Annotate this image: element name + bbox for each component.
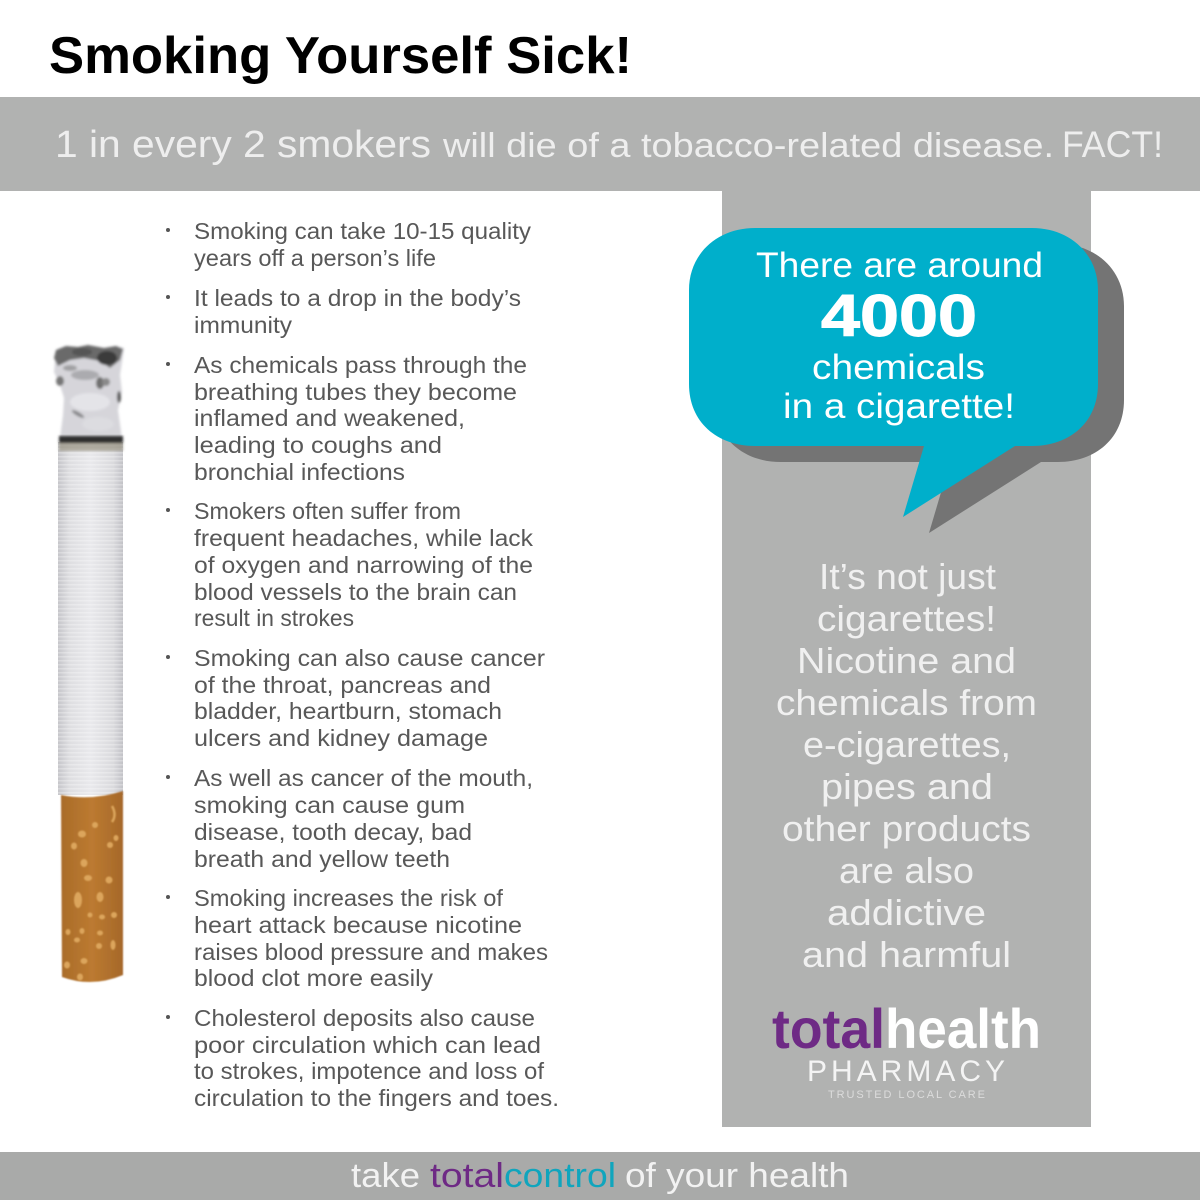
bullet 4: of oxygen and narrowing of the [194,552,533,578]
cigarette filter [61,791,123,982]
panel text: not just cigarettes: pipes and [821,766,993,807]
tagline [351,1157,849,1195]
bullet 3: leading to coughs and [194,432,442,458]
tagline: of your health [625,1157,849,1195]
panel text: not just cigarettes: are also [839,850,974,891]
bullet 4 [166,498,534,631]
logo: totalhealth pharmacy: PHARMACY [807,1055,1005,1088]
top banner [0,97,1200,191]
bubble text: chemicals [812,348,985,387]
bullet 2: It leads to a drop in the body’s [194,285,521,311]
bullet 3: inflamed and weakened, [194,405,465,431]
bullet 3: As chemicals pass through the [194,352,527,378]
bullet 6: breath and yellow teeth [194,846,450,872]
bullet 1: years off a person’s life [194,245,436,271]
bullet 8: poor circulation which can lead [194,1032,541,1058]
banner fact text: FACT! [1062,124,1163,165]
banner fact text: will die of a tobacco-related disease. [442,127,1054,165]
bullet 3 [166,352,527,485]
bubble text: 4000 [821,283,977,349]
bullet 7: Smoking increases the risk of [194,885,504,911]
bullet 6: smoking can cause gum [194,792,465,818]
bubble text [756,246,1043,426]
panel text: not just cigarettes: addictive [827,892,986,933]
bullet 5: Smoking can also cause cancer [194,645,545,671]
bullet 4: frequent headaches, while lack [194,525,534,551]
title: Smoking Yourself Sick! [49,27,632,85]
panel text: not just cigarettes: cigarettes! [817,598,996,639]
cigarette ash [54,345,124,438]
bullet list [166,218,559,1111]
banner fact text [55,124,1163,166]
panel text: not just cigarettes: chemicals from [776,682,1037,723]
speech bubble callout [689,228,1124,533]
logo: totalhealth pharmacy: TRUSTED LOCAL CARE [828,1089,985,1101]
cigarette burn line [59,436,123,451]
bullet 8: Cholesterol deposits also cause [194,1005,535,1031]
logo: totalhealth pharmacy: total [772,997,885,1060]
bubble text: There are around [756,246,1043,285]
bullet 5: ulcers and kidney damage [194,725,488,751]
bullet 6: disease, tooth decay, bad [194,819,472,845]
panel text: not just cigarettes: Nicotine and [797,640,1016,681]
logo: totalhealth pharmacy [772,997,1041,1101]
bullet 7: raises blood pressure and makes [194,939,548,965]
tagline: control [504,1157,616,1195]
bullet 3: bronchial infections [194,459,405,485]
tagline: total [430,1157,504,1195]
bullet 5: of the throat, pancreas and [194,672,491,698]
bullet 6 [166,765,533,872]
bullet 4: blood vessels to the brain can [194,579,517,605]
bullet 7: blood clot more easily [194,965,434,991]
bullet 2: immunity [194,312,293,338]
bullet 1: Smoking can take 10-15 quality [194,218,532,244]
bullet 7 [166,885,548,991]
bubble text: in a cigarette! [783,387,1015,426]
panel text: not just cigarettes [776,556,1037,975]
bullet 1 [166,218,532,271]
bullet 8: circulation to the fingers and toes. [194,1085,559,1111]
panel text: not just cigarettes: It’s not just [819,556,996,597]
bullet 6: As well as cancer of the mouth, [194,765,533,791]
bullet 4: result in strokes [194,605,354,631]
bubble [689,228,1098,517]
filter speckles [64,806,118,980]
bullet 5 [166,645,545,751]
panel text: not just cigarettes: and harmful [802,934,1011,975]
bullet 2 [166,285,521,338]
bullet 4: Smokers often suffer from [194,498,461,524]
tagline: take [351,1157,420,1195]
logo: totalhealth pharmacy: health [885,997,1041,1060]
bullet 8: to strokes, impotence and loss of [194,1058,545,1084]
cigarette paper [58,442,123,795]
icon: cigarette [54,345,124,982]
banner fact text: 1 in every 2 smokers [55,124,431,166]
bullet 5: bladder, heartburn, stomach [194,698,502,724]
bottom strip [0,1152,1200,1200]
right grey panel [722,191,1091,1127]
bubble shadow [715,244,1124,533]
bullet 7: heart attack because nicotine [194,912,522,938]
bullet 3: breathing tubes they become [194,379,517,405]
bullet 8 [166,1005,559,1111]
panel text: not just cigarettes: other products [782,808,1031,849]
panel text: not just cigarettes: e-cigarettes, [803,724,1011,765]
